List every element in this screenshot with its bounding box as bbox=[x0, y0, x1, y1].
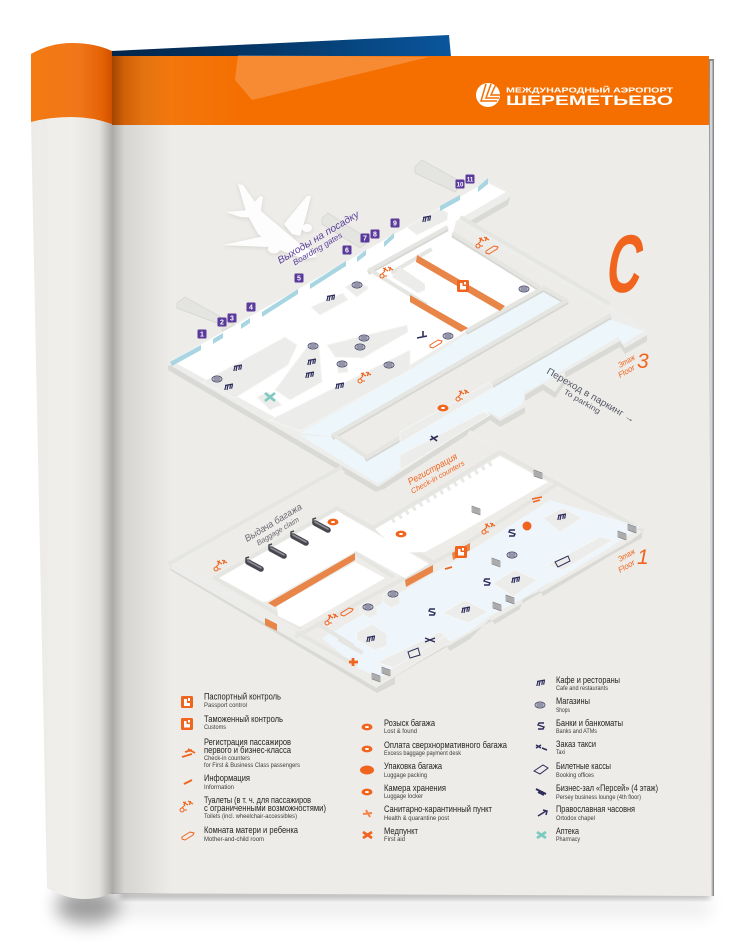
gate number badges bbox=[198, 174, 474, 338]
glass facade bbox=[170, 178, 488, 366]
legend column 3: Banks and ATMs bbox=[556, 728, 598, 735]
label: floor 3: Floor bbox=[616, 363, 637, 380]
legend column 1 bbox=[180, 692, 326, 843]
icon: quarantine post bbox=[363, 810, 372, 817]
check-in hall bbox=[375, 456, 548, 553]
icon: chapel bbox=[538, 810, 547, 816]
label: floor 1: Этаж bbox=[616, 547, 637, 564]
legend column 2: First aid bbox=[384, 836, 405, 843]
legend column 3: Заказ такси bbox=[556, 739, 596, 749]
terminal letter C: C bbox=[601, 219, 650, 310]
legend column 2 bbox=[360, 718, 507, 843]
icon: lost and found bbox=[362, 724, 372, 730]
legend column 1: Регистрация пассажиров bbox=[204, 737, 291, 747]
icon: first aid bbox=[363, 832, 372, 838]
cream island bbox=[336, 304, 609, 458]
legend column 1: Таможенный контроль bbox=[204, 714, 283, 724]
legend column 1: Customs bbox=[204, 724, 227, 731]
orange customs strips bbox=[410, 255, 505, 332]
icon: shops bbox=[535, 702, 545, 708]
icon: business check-in bbox=[182, 749, 195, 757]
legend column 1: Mother-and-child room bbox=[204, 836, 264, 843]
orange header band bbox=[111, 55, 709, 125]
legend column 2: Luggage locker bbox=[384, 793, 424, 800]
legend column 2: Упаковка багажа bbox=[384, 761, 442, 771]
legend column 1: первого и бизнес-класса bbox=[204, 745, 291, 755]
legend column 3: Taxi bbox=[556, 749, 565, 756]
legend column 2: Медпункт bbox=[384, 826, 418, 836]
legend column 2: Health & quarantine post bbox=[384, 815, 449, 822]
page background bbox=[111, 56, 711, 896]
legend column 2: Оплата сверхнормативного багажа bbox=[384, 740, 507, 750]
label: floor 1: 1 bbox=[637, 546, 649, 569]
legend column 3: Cafe and restaurants bbox=[556, 685, 609, 692]
pharmacy cross on floor 3 bbox=[265, 393, 275, 401]
legend column 1: Информация bbox=[204, 773, 250, 783]
baggage hall bbox=[219, 511, 429, 602]
gate number badges: 3 bbox=[230, 316, 234, 322]
floor 1 pads bbox=[298, 508, 613, 668]
legend column 1: с ограниченными возможностями) bbox=[204, 803, 326, 813]
legend bbox=[180, 675, 658, 843]
label: floor 3: 3 bbox=[637, 350, 649, 373]
gate number badges: 5 bbox=[297, 276, 301, 282]
legend column 3: Shops bbox=[556, 707, 571, 714]
legend column 1: Комната матери и ребенка bbox=[204, 825, 298, 835]
legend column 2: Luggage packing bbox=[384, 772, 427, 779]
label: floor 1: Floor bbox=[616, 558, 637, 575]
gate number badges: 10 bbox=[457, 182, 464, 188]
legend column 2: Розыск багажа bbox=[384, 718, 435, 728]
legend column 3: Persey business lounge (4th floor) bbox=[556, 794, 641, 801]
legend column 1: Toilets (incl. wheelchair-accessibles) bbox=[204, 813, 297, 820]
orange strips bbox=[265, 543, 470, 631]
logo: Sheremetyevo bbox=[476, 83, 674, 108]
legend column 3: Pharmacy bbox=[556, 836, 581, 843]
airplane bbox=[223, 184, 317, 259]
legend column 2: Камера хранения bbox=[384, 783, 446, 793]
check-in counters row bbox=[392, 461, 495, 521]
outer bottom wall bbox=[171, 566, 378, 686]
gate number badges: 2 bbox=[220, 320, 224, 326]
legend column 3 bbox=[534, 675, 658, 843]
legend column 2: Excess baggage payment desk bbox=[384, 750, 462, 757]
legend column 3: Бизнес-зал «Персей» (4 этаж) bbox=[556, 783, 658, 793]
icon: cafes bbox=[537, 680, 545, 686]
label: floor 3 bbox=[616, 350, 649, 380]
gate number badges: 1 bbox=[200, 332, 204, 338]
icon: banks bbox=[538, 723, 544, 729]
legend column 2: Санитарно-карантинный пункт bbox=[384, 804, 492, 814]
gate number badges: 8 bbox=[373, 232, 377, 238]
legend column 1: Information bbox=[204, 784, 234, 791]
label: floor 1 bbox=[616, 546, 649, 575]
icon: mother and child bbox=[182, 832, 194, 840]
legend column 1: Туалеты (в т. ч. для пассажиров bbox=[204, 795, 311, 805]
gate number badges: 9 bbox=[393, 220, 397, 228]
icon: business lounge bbox=[536, 789, 546, 795]
label: check-in counters: Check-in counters bbox=[409, 459, 466, 496]
floor 3 icons bbox=[212, 216, 529, 441]
legend column 1: Passport control bbox=[204, 702, 247, 709]
interior walls bbox=[334, 218, 609, 459]
conveyor belts bbox=[246, 518, 328, 569]
floor 1 plan bbox=[170, 430, 642, 693]
legend column 3: Православная часовня bbox=[556, 804, 635, 814]
logo emblem bbox=[476, 83, 500, 107]
icon: passport control bbox=[181, 696, 193, 708]
gate number badges: 11 bbox=[467, 178, 474, 184]
baggage hall walls bbox=[170, 452, 642, 636]
label: boarding gates: Boarding gates bbox=[291, 231, 344, 267]
label: baggage claim: Выдача багажа bbox=[243, 502, 304, 545]
legend column 2: Lost & found bbox=[384, 728, 417, 735]
legend column 1: Check-in counters bbox=[204, 755, 251, 762]
left page curl bbox=[31, 43, 112, 899]
label: to parking: To parking bbox=[562, 387, 602, 416]
label: check-in counters: Регистрация bbox=[406, 451, 460, 488]
piers bbox=[177, 160, 463, 331]
legend column 3: Booking offices bbox=[556, 772, 595, 779]
logo: Sheremetyevo: ШЕРЕМЕТЬЕВО bbox=[506, 92, 673, 108]
legend column 3: Ortodox chapel bbox=[556, 815, 595, 822]
icon: taxi bbox=[536, 745, 547, 750]
label: boarding gates: Выходы на посадку bbox=[276, 209, 362, 267]
legend column 3: Аптека bbox=[556, 826, 579, 836]
right-hand page stack edge bbox=[707, 59, 714, 896]
spine shadow on page bbox=[111, 56, 171, 894]
legend column 3: Банки и банкоматы bbox=[556, 718, 623, 728]
icon: luggage locker bbox=[362, 789, 372, 795]
gate number badges: 7 bbox=[363, 236, 367, 242]
label: baggage claim: Baggage claim bbox=[255, 515, 301, 547]
corridor lower bbox=[300, 318, 644, 484]
legend column 3: Кафе и рестораны bbox=[556, 675, 620, 685]
shop pads bbox=[203, 208, 493, 470]
label: to parking: Переход в паркинг → bbox=[544, 366, 637, 426]
legend column 1: Паспортный контроль bbox=[204, 692, 281, 702]
icon: information bbox=[184, 780, 192, 784]
icon: toilets bbox=[180, 801, 193, 812]
icon: booking offices bbox=[534, 765, 548, 774]
legend column 1: for First & Business Class passengers bbox=[204, 762, 301, 769]
floor 3 plan bbox=[168, 160, 647, 493]
back page: blue cover edge bbox=[111, 35, 451, 57]
legend column 3: Магазины bbox=[556, 696, 590, 706]
icon: customs bbox=[181, 718, 193, 730]
icon: excess baggage bbox=[362, 746, 372, 752]
strip behind customs bbox=[452, 223, 608, 310]
floor 3 slab bbox=[168, 178, 647, 493]
corridor upper bbox=[300, 292, 563, 437]
grey cross block in customs bbox=[392, 267, 425, 293]
floor 1 slab bbox=[170, 430, 642, 693]
drop shadow under the magazine bbox=[56, 888, 710, 924]
gate number badges: 6 bbox=[345, 248, 349, 254]
passenger concourse bbox=[322, 500, 640, 678]
label: floor 3: Этаж bbox=[616, 353, 637, 370]
white hall bbox=[172, 182, 537, 431]
gate number badges: 4 bbox=[249, 304, 253, 312]
floor 1 icons bbox=[214, 470, 636, 682]
icon: pharmacy bbox=[537, 832, 546, 838]
icon: luggage packing bbox=[360, 766, 374, 774]
legend column 3: Билетные кассы bbox=[556, 761, 611, 771]
logo: Sheremetyevo: МЕЖДУНАРОДНЫЙ АЭРОПОРТ bbox=[506, 86, 674, 94]
